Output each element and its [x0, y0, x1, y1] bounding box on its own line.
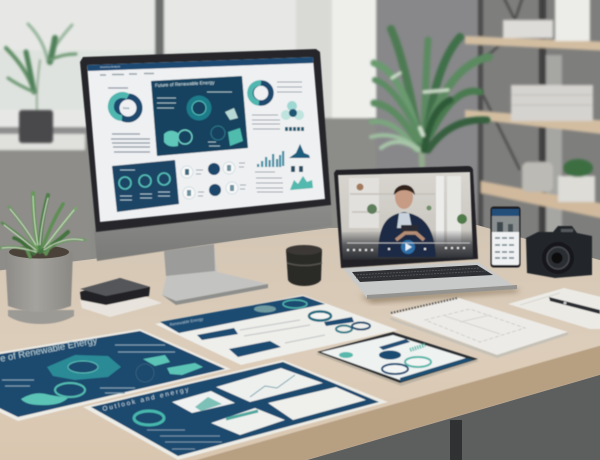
lower middle icons	[181, 162, 246, 199]
shelving unit	[465, 0, 600, 255]
donut two	[250, 83, 271, 103]
shelves in video	[349, 176, 467, 246]
printed sheet: left	[0, 329, 231, 421]
keyboard	[352, 265, 493, 282]
monitor chin	[94, 203, 332, 261]
donut one	[111, 95, 140, 120]
area charts	[289, 144, 313, 190]
shelves	[465, 36, 600, 51]
window	[0, 0, 310, 136]
top nav bar	[87, 57, 314, 71]
main panel: Future of Renewable Energy	[155, 80, 215, 88]
main panel	[151, 76, 248, 156]
notepad with pen	[508, 288, 600, 329]
pot	[5, 246, 73, 312]
desktop monitor	[80, 49, 332, 261]
base	[343, 262, 517, 298]
speaker on coaster	[80, 278, 162, 317]
monitor screen: Overview Analysis	[100, 65, 121, 69]
desk plant	[0, 193, 85, 324]
window plant	[6, 24, 76, 143]
printed sheet: bottom	[83, 360, 388, 460]
desk front edge	[190, 343, 600, 460]
spiral notebook	[390, 298, 568, 358]
tab row	[100, 74, 154, 75]
printed sheet: bottom: Outlook and energy	[102, 386, 190, 413]
white wall column	[296, 0, 376, 123]
window sill	[0, 134, 85, 150]
monitor bezel	[80, 49, 331, 232]
mug	[286, 245, 322, 286]
grey wall right	[376, 0, 600, 280]
lower right text lines	[255, 172, 283, 192]
room background	[0, 0, 600, 290]
monitor stand	[162, 244, 268, 305]
left text lines	[108, 88, 150, 152]
large background plant	[371, 29, 489, 165]
lower wall	[0, 150, 90, 275]
shadow	[360, 288, 520, 303]
laptop	[334, 166, 520, 303]
desk	[0, 225, 600, 460]
smartphone	[490, 206, 520, 268]
leaves	[0, 193, 85, 257]
chart card	[216, 368, 323, 402]
right text lines	[252, 82, 302, 129]
tablet	[316, 332, 479, 386]
lid	[334, 166, 478, 268]
camera	[526, 226, 592, 278]
presenter	[378, 185, 436, 257]
right diagram	[281, 101, 305, 129]
printed sheet: top centre	[155, 295, 398, 365]
floor under desk	[290, 372, 600, 460]
hexagon	[47, 355, 121, 380]
monitor screen	[87, 57, 325, 222]
video screen	[338, 172, 473, 260]
printed sheet: top centre: Renewable Energy	[169, 316, 203, 327]
shelf pots	[522, 162, 553, 192]
play button	[401, 240, 415, 254]
books	[503, 20, 553, 38]
soil	[9, 246, 69, 258]
saucer	[8, 310, 74, 324]
bar chart	[257, 151, 284, 167]
donut one: Data	[123, 106, 130, 110]
lower left panel	[112, 160, 179, 212]
